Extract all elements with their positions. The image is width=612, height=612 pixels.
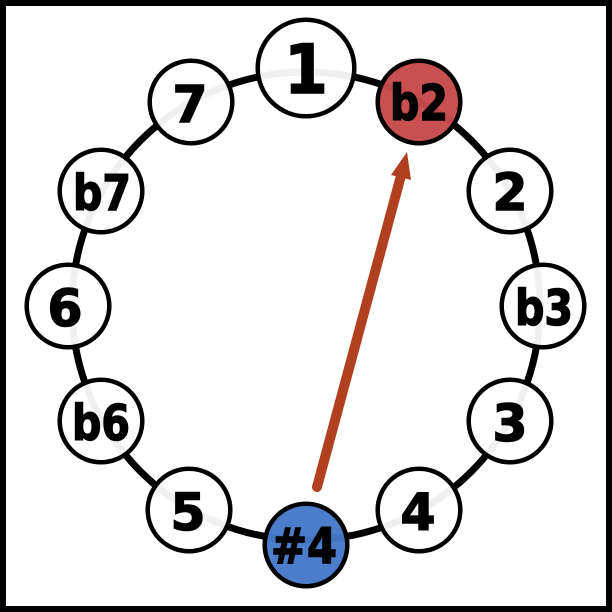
note: b2 (highlighted) [378, 61, 460, 143]
arrow from #4 to b2 [317, 152, 411, 487]
note: #4 (highlighted) [265, 504, 347, 586]
note: 5: 5 [170, 484, 206, 543]
note: b6 [60, 380, 142, 462]
note: 3 [469, 380, 551, 462]
note: 1: 1 [284, 31, 328, 110]
note: 4 [378, 469, 460, 551]
note: 5 [148, 469, 230, 551]
note: b6: b6 [72, 395, 130, 452]
note: 3: 3 [492, 395, 528, 454]
note: b7: b7 [73, 165, 131, 222]
note: 7 [150, 61, 232, 143]
note: b2 (highlighted): b2 [390, 75, 448, 132]
note: 6: 6 [48, 280, 82, 339]
ring [72, 72, 540, 540]
note: b3: b3 [515, 280, 573, 337]
note: b3 [502, 265, 584, 347]
note: 7: 7 [172, 76, 208, 135]
note: #4 (highlighted): #4 [271, 518, 337, 575]
note: 1 [258, 20, 354, 116]
note: 6 [27, 265, 109, 347]
note: 2: 2 [492, 164, 528, 223]
note: 2 [469, 150, 551, 232]
note: 4: 4 [400, 484, 436, 543]
note: b7 [60, 150, 142, 232]
